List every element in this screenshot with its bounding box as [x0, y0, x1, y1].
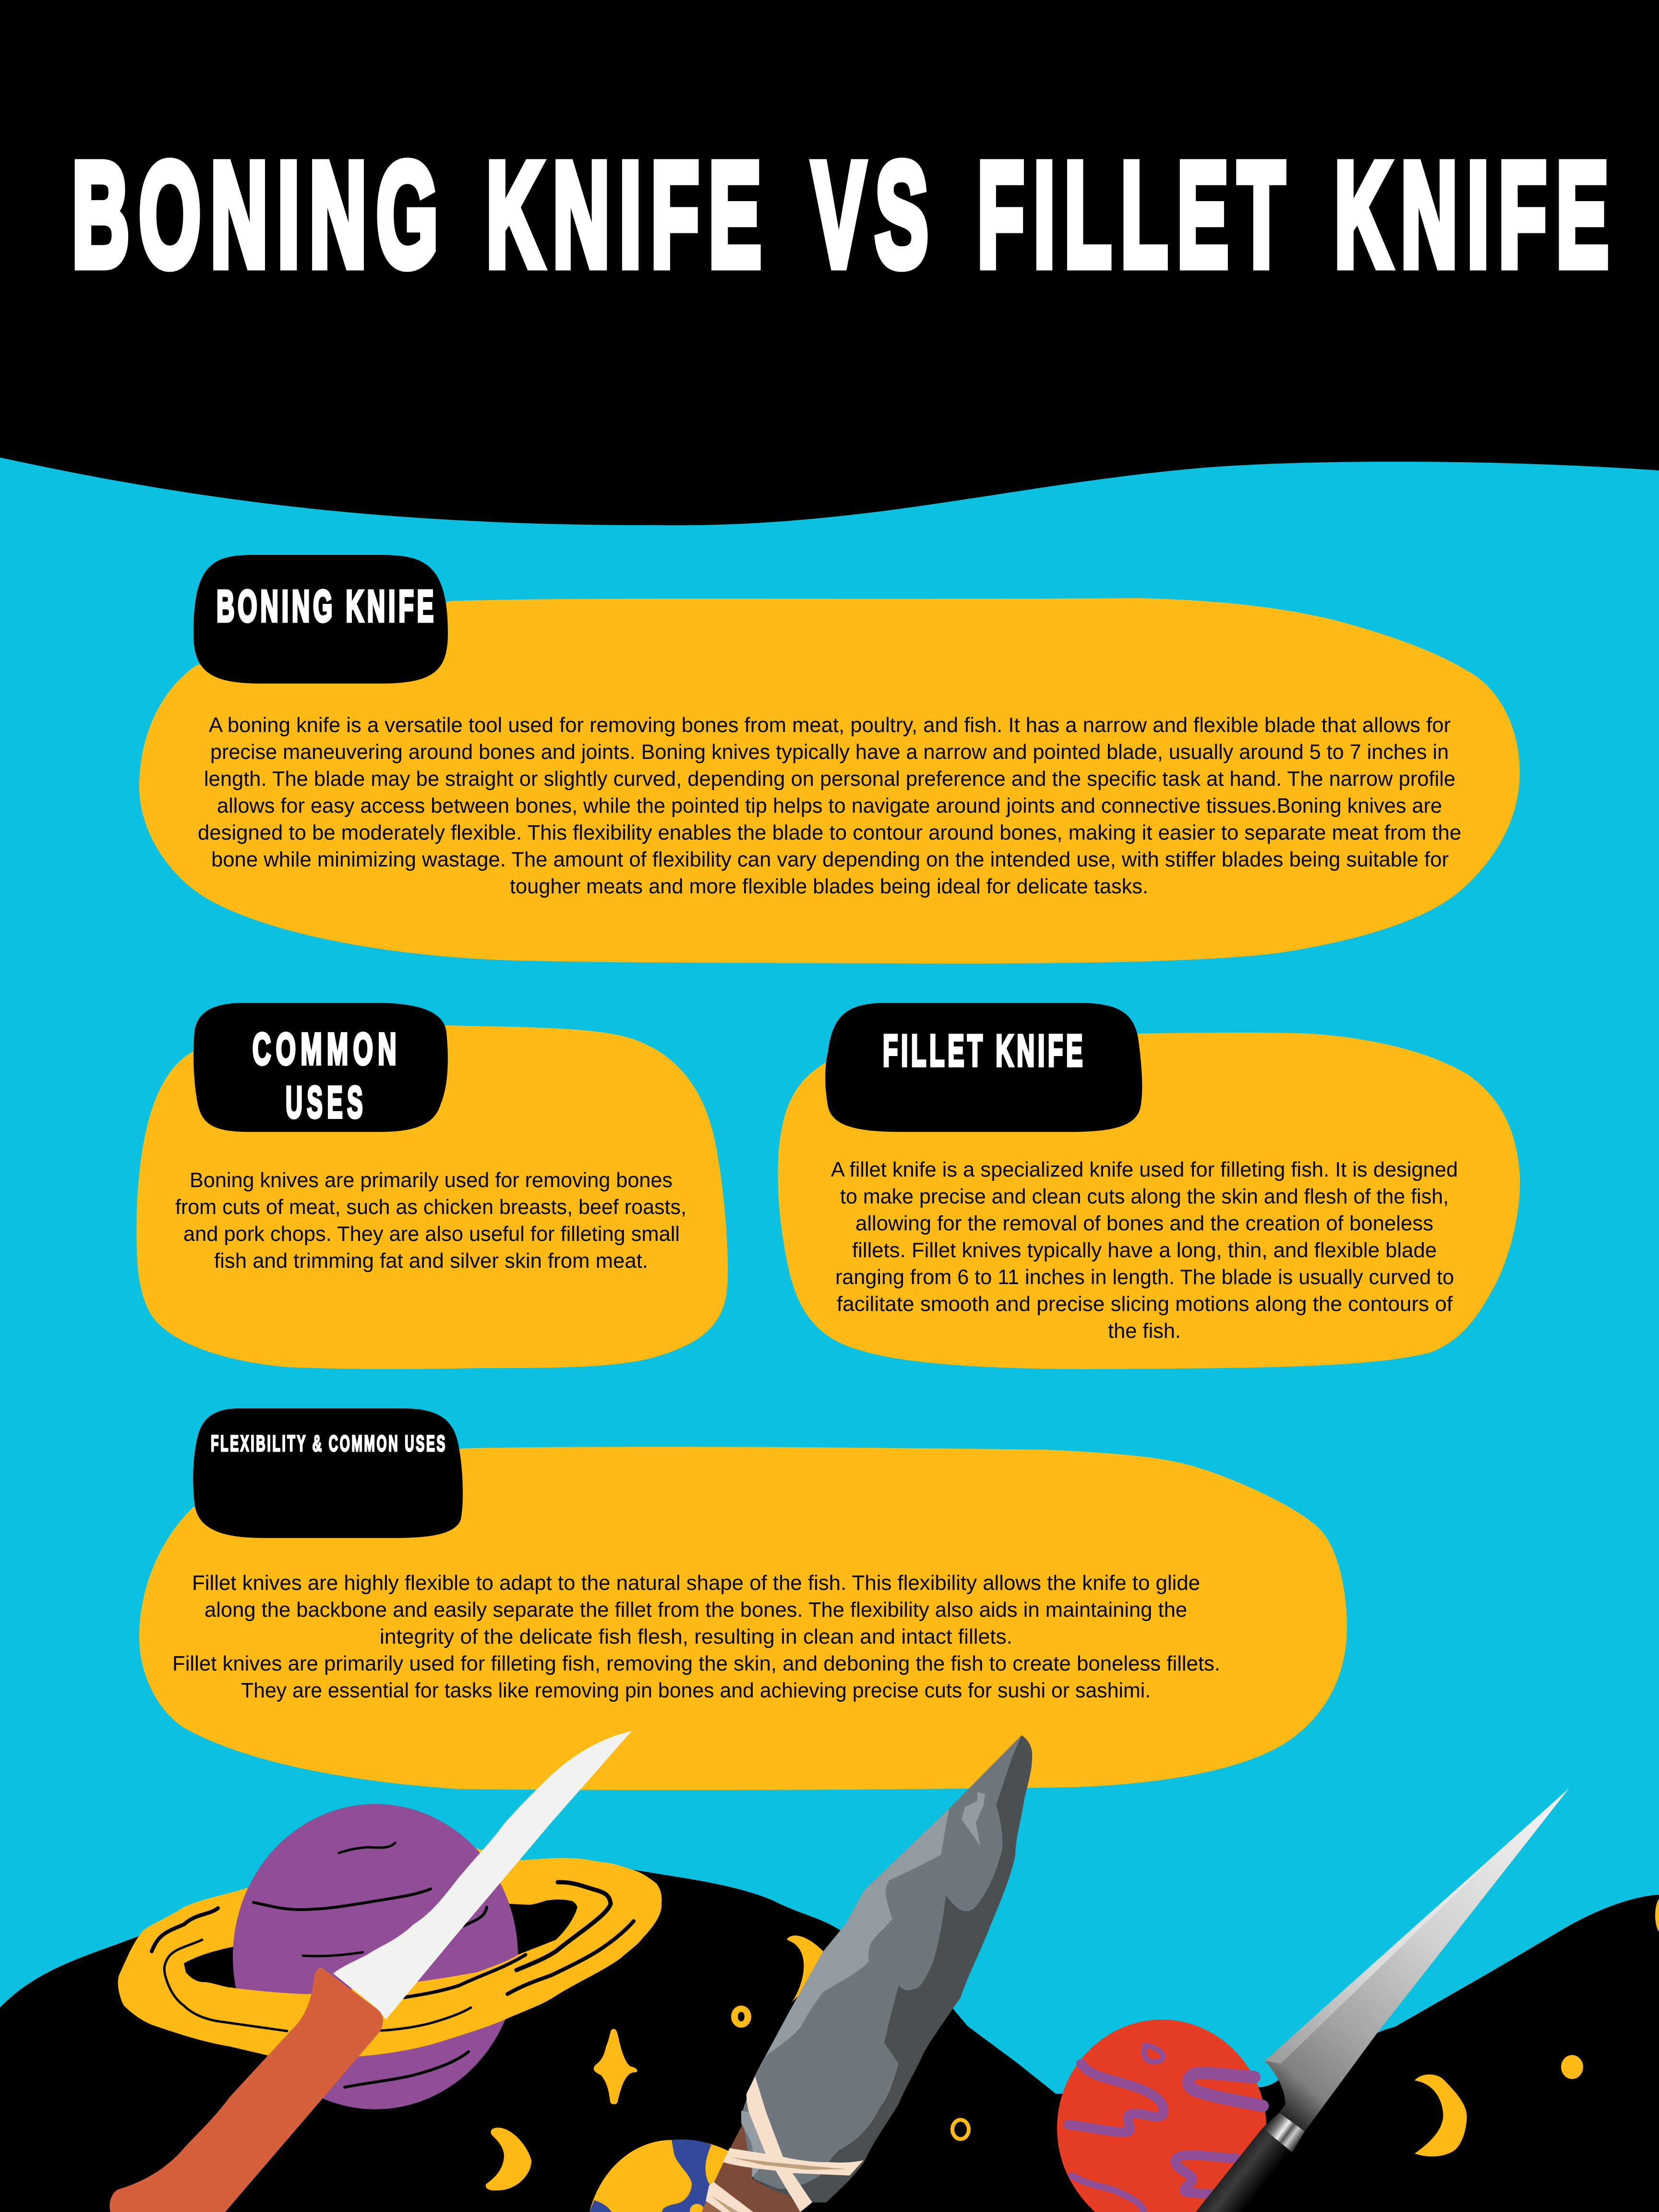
body text: integrity of the delicate fish flesh, resulting in clean and intact fillets. — [380, 1625, 1012, 1648]
heading tab — [193, 1408, 463, 1538]
black hill silhouette — [0, 1866, 1659, 2212]
body text: designed to be moderately flexible. This flexibility enables the blade to contour around bones, making it easier to separate meat from the — [198, 821, 1461, 844]
planet yellow land — [589, 2140, 768, 2212]
blade bevel — [1265, 1788, 1569, 2064]
body text: and pork chops. They are also useful for filleting small — [183, 1222, 680, 1246]
body text: A fillet knife is a specialized knife used for filleting fish. It is designed — [831, 1158, 1458, 1181]
red planet — [1057, 2020, 1266, 2212]
icon: crescent moon left — [486, 2128, 531, 2190]
ring front — [229, 1949, 533, 2056]
wrap band vertical — [746, 2076, 812, 2212]
body text — [175, 1168, 686, 1273]
panel: boning knife — [139, 555, 1520, 963]
heading: FILLET KNIFE — [883, 1025, 1086, 1075]
panel: common uses — [136, 1003, 728, 1369]
icon: small ring — [731, 2006, 751, 2028]
ring and planet ink lines — [152, 1843, 634, 2087]
ring back — [118, 1824, 661, 2056]
icon: edge planet — [1655, 1897, 1659, 1934]
wrap band horizontal — [723, 2148, 864, 2176]
body text: Fillet knives are primarily used for filleting fish, removing the skin, and deboning the fish to create boneless fillets. — [172, 1652, 1220, 1675]
heading — [252, 1024, 401, 1127]
heading tab — [193, 555, 448, 684]
body text: allowing for the removal of bones and the creation of boneless — [855, 1212, 1433, 1235]
panel shape — [139, 1447, 1347, 1790]
blade — [333, 1731, 632, 2020]
body text: tougher meats and more flexible blades being ideal for delicate tasks. — [510, 875, 1148, 898]
wrap streak — [730, 2157, 847, 2170]
heading: COMMON — [252, 1024, 401, 1074]
body text: length. The blade may be straight or slightly curved, depending on personal preference and the specific task at hand. The narrow profile — [204, 767, 1455, 791]
icon: yellow dot — [1561, 2055, 1583, 2079]
icon: crescent moon right — [1415, 2074, 1467, 2156]
body text: along the backbone and easily separate the fillet from the bones. The flexibility also aids in maintaining the — [204, 1598, 1187, 1622]
title: VS — [812, 132, 938, 297]
handle — [1196, 2128, 1292, 2212]
purple squiggles — [1069, 2045, 1262, 2212]
stone knife illustration — [702, 1735, 1032, 2212]
stone lower highlight — [741, 2111, 766, 2178]
body text: They are essential for tasks like removing pin bones and achieving precise cuts for sushi or sashimi. — [241, 1679, 1151, 1702]
body text — [831, 1158, 1458, 1343]
heading: FLEXIBILITY & COMMON USES — [211, 1431, 447, 1456]
body text: facilitate smooth and precise slicing motions along the contours of — [837, 1292, 1453, 1316]
body text: bone while minimizing wastage. The amount of flexibility can vary depending on the intended use, with stiffer blades being suitable for — [211, 848, 1449, 871]
blue sea — [662, 2140, 711, 2212]
icon: crescent moon behind stone — [787, 1936, 823, 2002]
heading: BONING KNIFE — [216, 581, 437, 631]
stone dark side — [741, 1735, 1032, 2202]
body text: fillets. Fillet knives typically have a long, thin, and flexible blade — [852, 1238, 1437, 1262]
ringed planet — [118, 1804, 661, 2109]
wrap band lower — [706, 2182, 753, 2212]
panel: fillet knife — [778, 1003, 1520, 1369]
body text — [172, 1571, 1220, 1702]
body text: precise maneuvering around bones and joints. Boning knives typically have a narrow and pointed blade, usually around 5 to 7 inches in — [210, 740, 1449, 764]
fillet knife illustration — [1196, 1788, 1569, 2212]
blue sea lower left — [589, 2200, 612, 2212]
small land — [690, 2204, 704, 2212]
body text: Fillet knives are highly flexible to adapt to the natural shape of the fish. This flexibility allows the knife to glide — [192, 1571, 1200, 1595]
body text: ranging from 6 to 11 inches in length. The blade is usually curved to — [835, 1265, 1454, 1289]
stone light facet — [755, 1809, 949, 2075]
title: KNIFE — [486, 132, 771, 297]
handle — [702, 2125, 800, 2212]
body text: fish and trimming fat and silver skin from meat. — [214, 1249, 648, 1273]
earth planet — [589, 2140, 768, 2212]
panel shape — [778, 1033, 1520, 1369]
planet body — [233, 1804, 518, 2109]
planet body — [1057, 2020, 1266, 2212]
heading tab — [825, 1003, 1142, 1132]
body text — [198, 713, 1461, 898]
panel: flexibility and common uses — [139, 1408, 1347, 1790]
header wave — [0, 0, 1659, 525]
heading: USES — [286, 1077, 367, 1127]
icon: small spiral — [952, 2120, 969, 2139]
icon: four point star — [594, 2029, 637, 2104]
stone tip highlight — [962, 1792, 985, 1846]
title: FILLET — [977, 132, 1294, 297]
body text: the fish. — [1108, 1319, 1181, 1343]
collar — [1262, 2113, 1305, 2152]
heading tab — [193, 1003, 448, 1132]
wrap streak lower — [710, 2195, 738, 2212]
stone mid facet — [741, 1735, 1022, 2189]
body text: to make precise and clean cuts along the skin and flesh of the fish, — [840, 1185, 1449, 1208]
blade — [1265, 1788, 1569, 2131]
body text: A boning knife is a versatile tool used for removing bones from meat, poultry, and fish. It has a narrow and flexible blade that allows for — [209, 713, 1451, 737]
handle — [109, 1968, 383, 2212]
body text: from cuts of meat, such as chicken breasts, beef roasts, — [175, 1195, 686, 1219]
boning knife illustration — [109, 1731, 632, 2212]
handle lighter patch — [702, 2202, 722, 2212]
title — [72, 132, 1618, 297]
panel shape — [136, 1025, 728, 1369]
body text: allows for easy access between bones, while the pointed tip helps to navigate around joints and connective tissues.Boning knives are — [217, 794, 1442, 817]
body text: Boning knives are primarily used for removing bones — [190, 1168, 673, 1192]
panel shape — [139, 598, 1520, 963]
title: BONING — [72, 132, 448, 297]
